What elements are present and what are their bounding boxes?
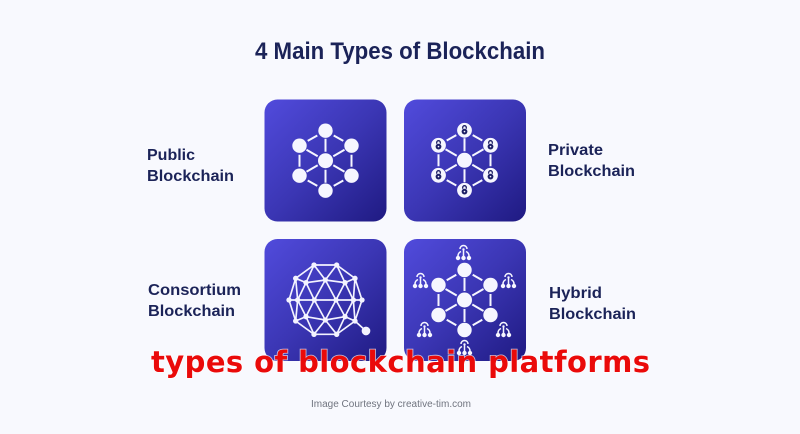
title: 4 Main Types of Blockchain (255, 38, 545, 65)
icon: private network with locks (431, 123, 498, 198)
label: consortium blockchain: Blockchain (148, 303, 235, 320)
label: hybrid blockchain: Hybrid (549, 285, 602, 302)
label: consortium blockchain (148, 282, 241, 320)
label: hybrid blockchain: Blockchain (549, 306, 636, 323)
label: public blockchain: Public (147, 147, 195, 164)
card: private (404, 100, 526, 222)
panel: private blockchain (404, 100, 635, 222)
label: private blockchain (548, 142, 635, 180)
label: hybrid blockchain (549, 285, 636, 323)
image credit: Image Courtesy by creative-tim.com (311, 399, 471, 410)
panel: public blockchain (147, 100, 386, 222)
panel: consortium blockchain (148, 239, 386, 361)
overlay caption: types of blockchain platforms (151, 345, 650, 379)
card: consortium (264, 239, 386, 361)
label: public blockchain: Blockchain (147, 168, 234, 185)
label: private blockchain: Private (548, 142, 603, 159)
panel: hybrid blockchain (404, 239, 636, 361)
label: private blockchain: Blockchain (548, 163, 635, 180)
icon: consortium mesh sphere (286, 262, 370, 337)
label: consortium blockchain: Consortium (148, 282, 241, 299)
card: public (264, 100, 386, 222)
card: hybrid (404, 239, 526, 361)
label: public blockchain (147, 147, 234, 185)
icon: hybrid network (413, 246, 516, 355)
icon: public network (292, 124, 359, 198)
